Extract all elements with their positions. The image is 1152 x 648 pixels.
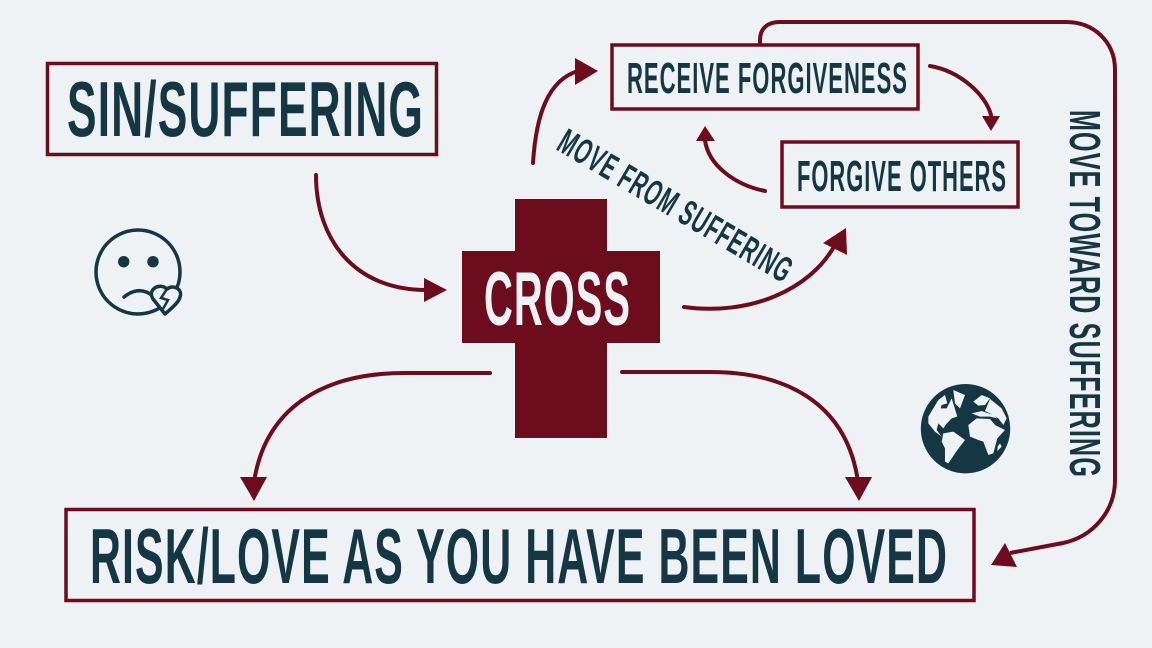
label: move from suffering: MOVE FROM SUFFERING [551,121,801,291]
icon: globe [921,384,1010,473]
box: sin/suffering: SIN/SUFFERING [67,65,424,153]
arrow: cross to risk/love left [240,373,490,501]
arrow: cross to risk/love right [622,372,872,501]
arrow: receive forgiveness to forgive others [930,66,1000,131]
arrow: receive forgiveness to risk/love [760,22,1115,567]
box: forgive others [782,142,1018,207]
arrow: cross to receive forgiveness [533,58,598,163]
cross [462,199,660,438]
box: receive forgiveness [612,45,918,109]
box: sin/suffering [48,64,436,154]
icon: sad face with broken heart [96,230,181,314]
arrow: sin to cross [316,175,447,302]
arrow: forgive others to receive forgiveness [696,126,765,191]
arrow: cross to forgive others [684,228,847,309]
cross label: CROSS [484,257,631,342]
